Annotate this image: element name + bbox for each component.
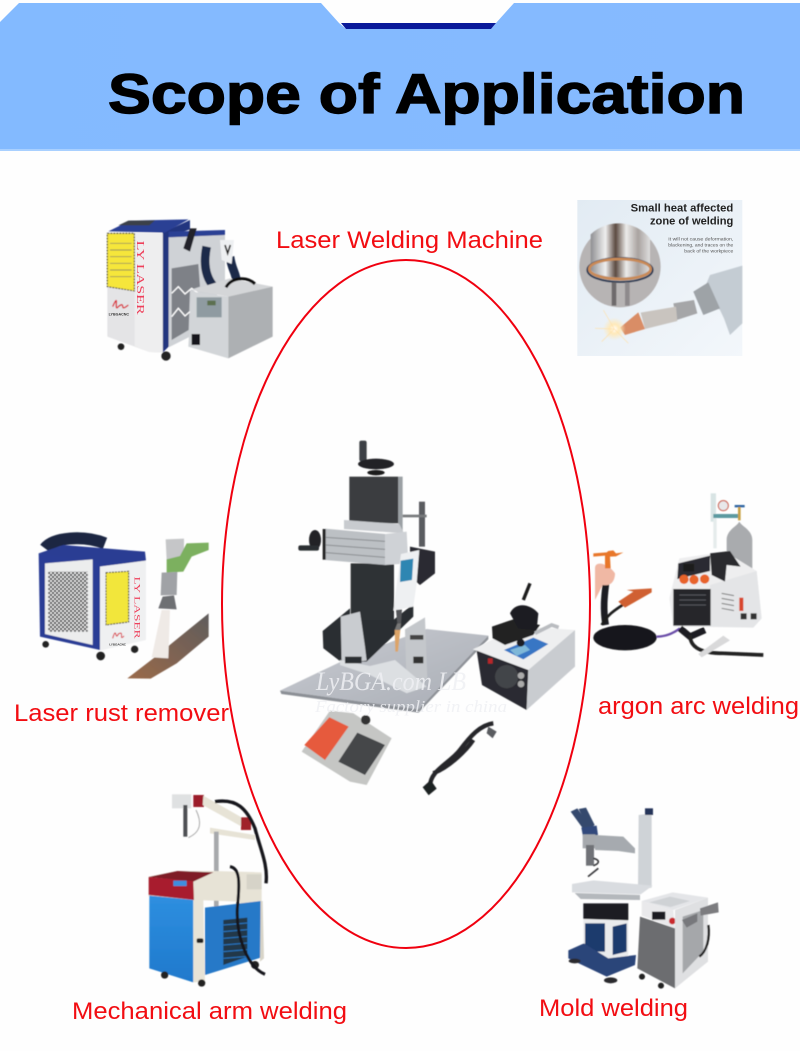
title: Scope of Application — [108, 62, 745, 125]
image caption: back of the workpiece — [684, 248, 734, 253]
foot pedal — [302, 711, 392, 785]
image: laser rust remover: LYBGACNC — [109, 642, 127, 646]
welder body — [669, 551, 762, 628]
image caption: zone of welding — [650, 215, 733, 227]
machine lettering: LY LASER — [134, 241, 145, 315]
watermark — [314, 667, 507, 716]
header banner — [0, 3, 800, 151]
label: mechanical arm welding: Mechanical arm welding — [72, 998, 347, 1025]
column — [349, 441, 403, 622]
central product: handheld welding rig — [280, 441, 497, 795]
image: argon arc welding — [593, 493, 763, 657]
power cord — [423, 723, 497, 795]
image: laser welding machine: LYBGACNC — [109, 312, 129, 316]
laser torch — [595, 266, 742, 343]
rust removal nozzle and pipe — [127, 539, 209, 679]
image: laser rust remover — [39, 538, 209, 679]
central product: power box — [473, 583, 575, 710]
label: mold welding: Mold welding — [539, 995, 688, 1022]
image: mold welding — [568, 808, 719, 989]
image: laser welding machine — [107, 219, 273, 361]
microscope and welding column — [571, 808, 653, 890]
image caption: Small heat affected — [631, 203, 733, 215]
machine lettering: LY LASER — [133, 577, 143, 639]
torch, hand and cables — [593, 550, 763, 657]
label: laser welding machine: Laser Welding Machine — [276, 227, 543, 254]
laser unit — [637, 892, 719, 989]
watermark: Factory supplier in china — [314, 697, 507, 716]
label: laser rust remover: Laser rust remover — [14, 700, 229, 727]
inset photo: weld seam — [579, 223, 661, 307]
image: mechanical arm welding — [149, 794, 266, 987]
image caption: It will not cause deformation, — [668, 237, 733, 242]
image: small heat affected zone — [577, 200, 742, 356]
horizontal slide — [298, 520, 408, 565]
articulated arm — [172, 794, 266, 912]
image caption — [631, 203, 734, 253]
cabinet — [149, 867, 265, 987]
gas bottle and regulator — [711, 493, 752, 573]
watermark: LyBGA.com LB — [315, 667, 466, 696]
image caption: blackening, and traces on the — [668, 242, 734, 247]
label: argon arc welding: argon arc welding — [598, 693, 799, 720]
work table — [568, 880, 653, 983]
base plate — [280, 629, 488, 709]
lower block and clamps — [323, 604, 427, 693]
red ellipse — [222, 260, 590, 948]
laser head — [393, 502, 435, 652]
